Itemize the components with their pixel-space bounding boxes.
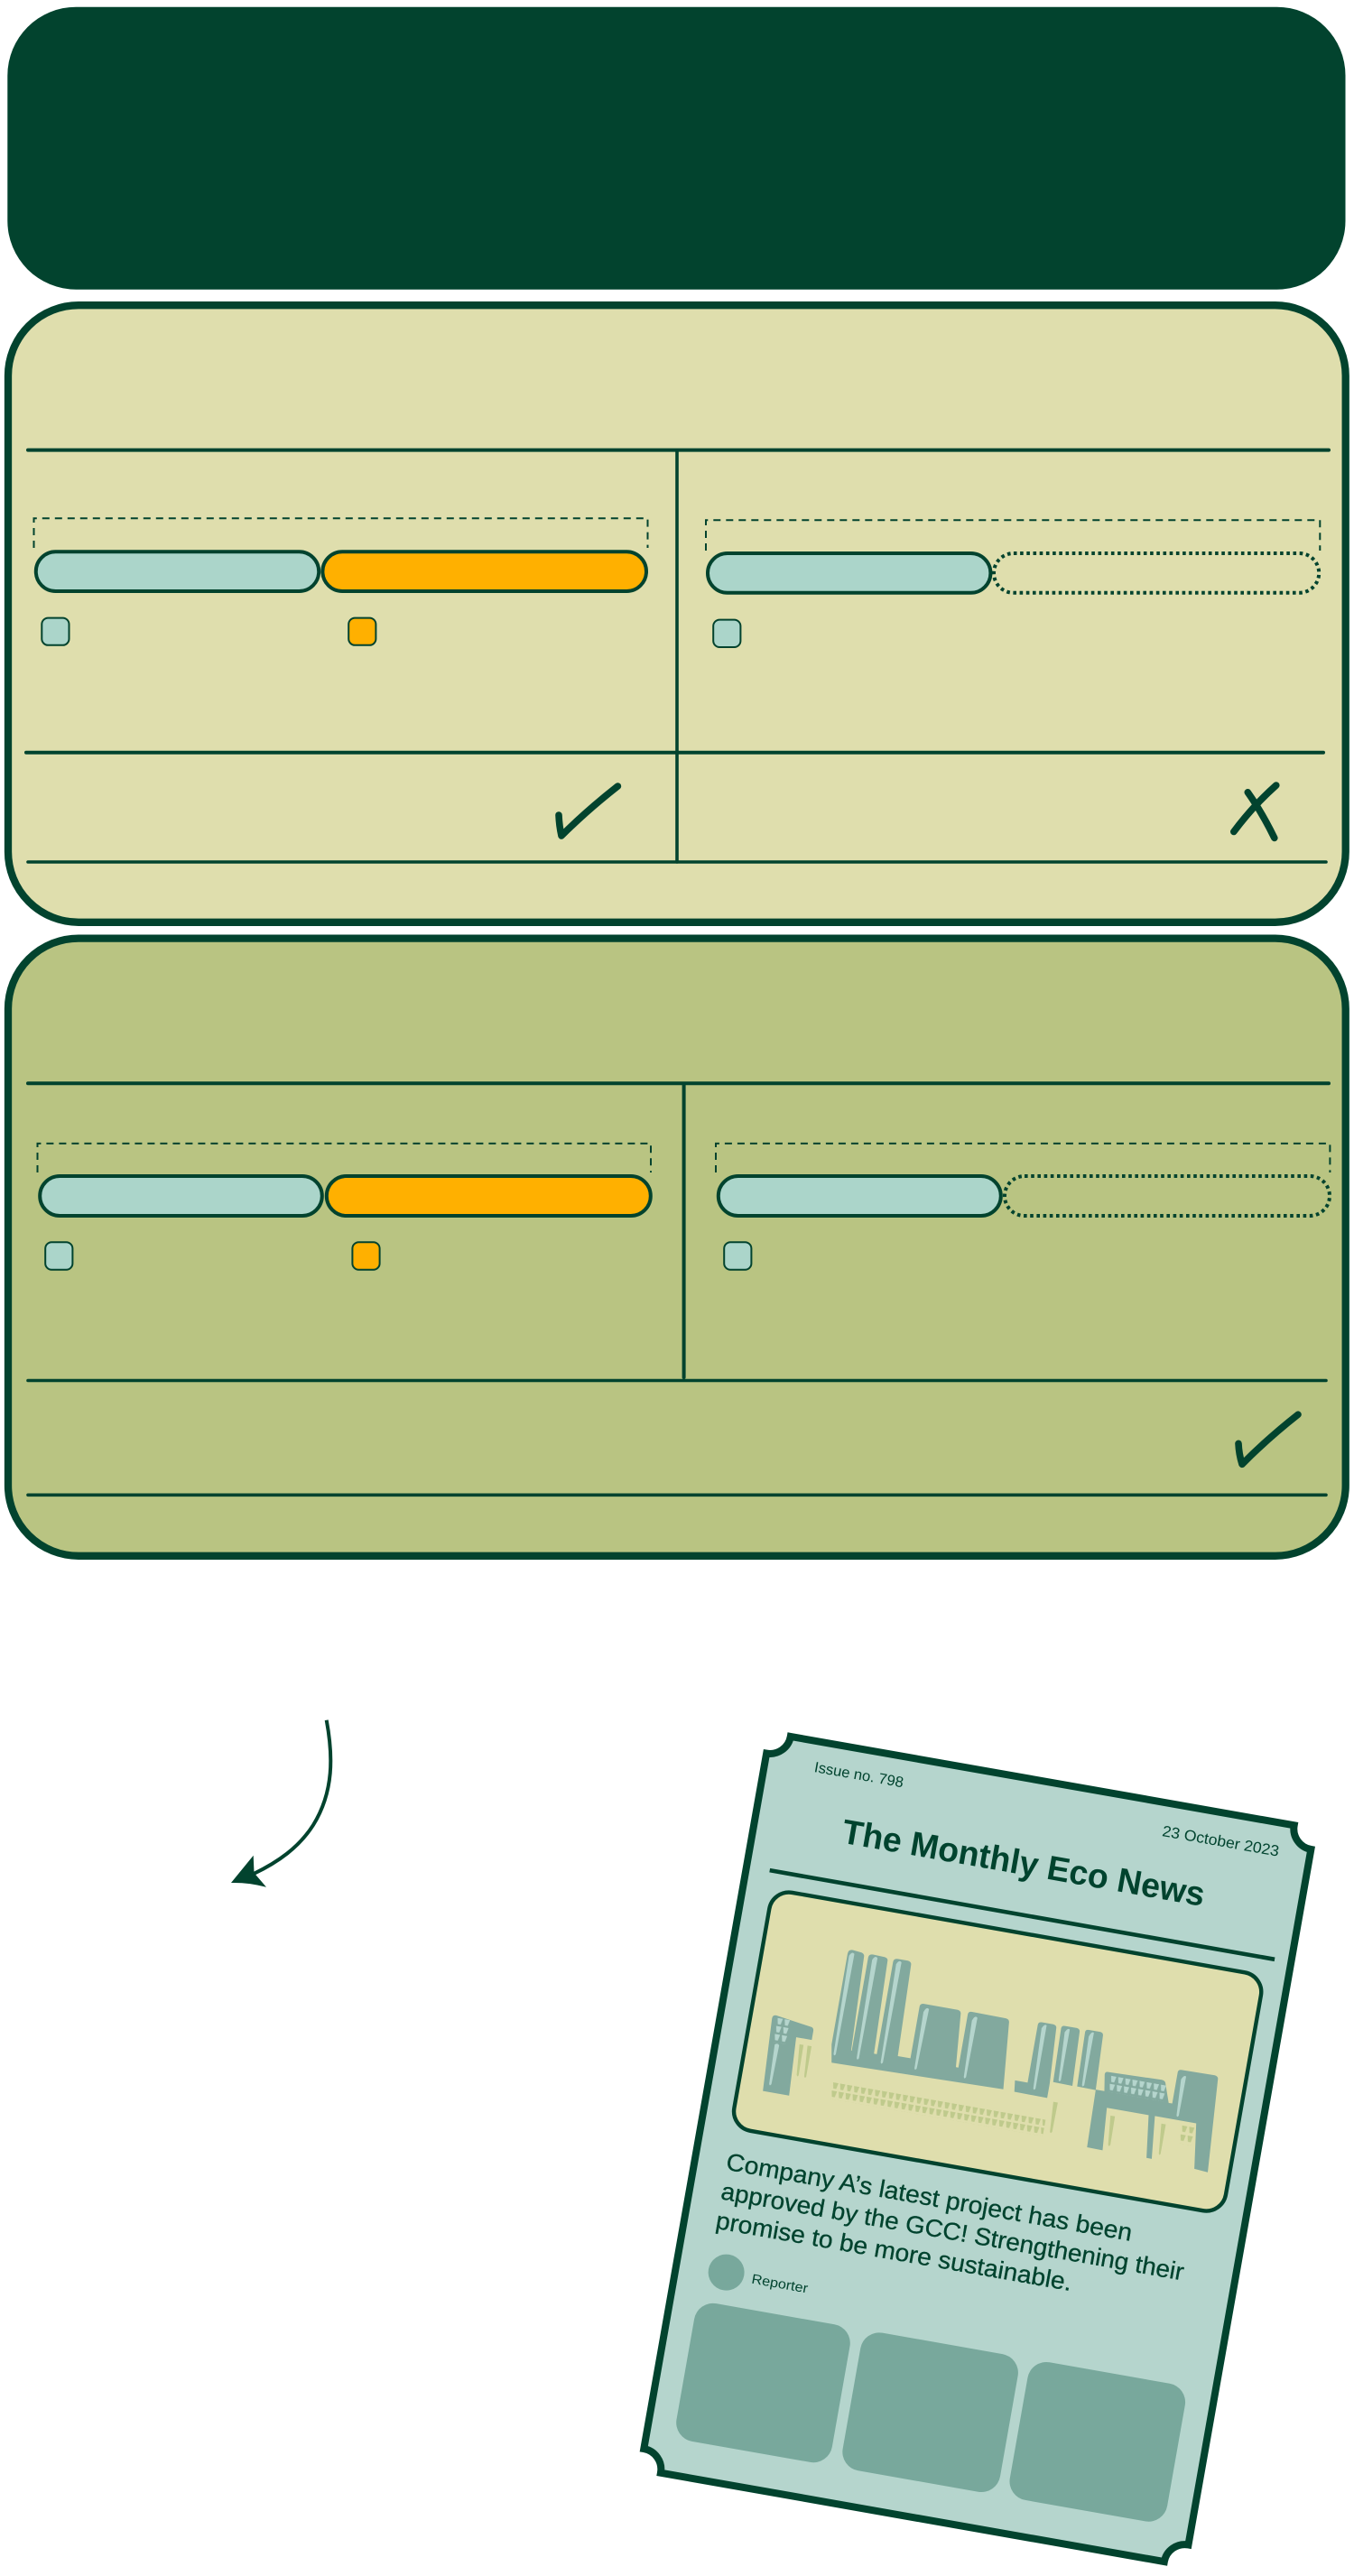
icon: check mark [559,786,617,836]
left bar: teal segment [40,1176,322,1216]
article text: promise to be more sustainable. [714,2207,1074,2296]
right bar: teal segment [719,1176,1001,1216]
window highlights [774,2018,790,2044]
thumbnail: left [673,2301,853,2466]
panel background [8,305,1346,922]
icon: cross mark [1234,785,1276,838]
legend swatch: orange [348,618,376,645]
article text: approved by the GCC! Strengthening their [719,2178,1186,2285]
date: 23 October 2023 [1161,1822,1281,1860]
legend swatch: teal [724,1242,751,1270]
legend swatch: orange [352,1242,380,1270]
newspaper title: The Monthly Eco News [839,1813,1208,1914]
right bar: dotted empty segment [1005,1176,1330,1216]
silos and tanks complex [829,1950,1023,2093]
light stripes on tanks [767,1942,1197,2156]
right bar: teal segment [708,553,990,593]
header banner [7,7,1345,290]
right bar: dashed bracket [716,1144,1330,1172]
left building [759,2015,815,2098]
newspaper card [640,1733,1314,2565]
left bar: orange segment [322,551,646,591]
reporter label: Reporter [750,2272,809,2296]
legend swatch: teal [45,1242,72,1270]
thumbnail: right [1006,2359,1188,2525]
article text: Company A’s latest project has been [724,2148,1135,2247]
right bar: dashed bracket [706,520,1320,551]
left bar: orange segment [327,1176,651,1216]
small silos [1013,2019,1060,2098]
left bar: dashed bracket [38,1144,651,1172]
left bar: dashed bracket [34,518,648,548]
illustration frame [731,1889,1265,2214]
right bar: dotted empty segment [994,553,1319,593]
panel: first comparison [8,305,1346,922]
icon: check mark [1238,1414,1298,1464]
panel: second comparison [8,939,1346,1556]
card background with notched corners [640,1733,1314,2565]
panel background [8,939,1346,1556]
illustration: industrial skyline [759,1938,1235,2173]
legend swatch: teal [42,618,69,645]
legend swatch: teal [713,620,740,647]
issue number: Issue no. 798 [813,1759,904,1791]
left bar: teal segment [36,551,319,591]
reporter avatar [705,2251,747,2293]
thumbnail: middle [839,2330,1021,2495]
arrow: curved pointer to newspaper [231,1720,330,1887]
light green marks [792,2044,1168,2155]
